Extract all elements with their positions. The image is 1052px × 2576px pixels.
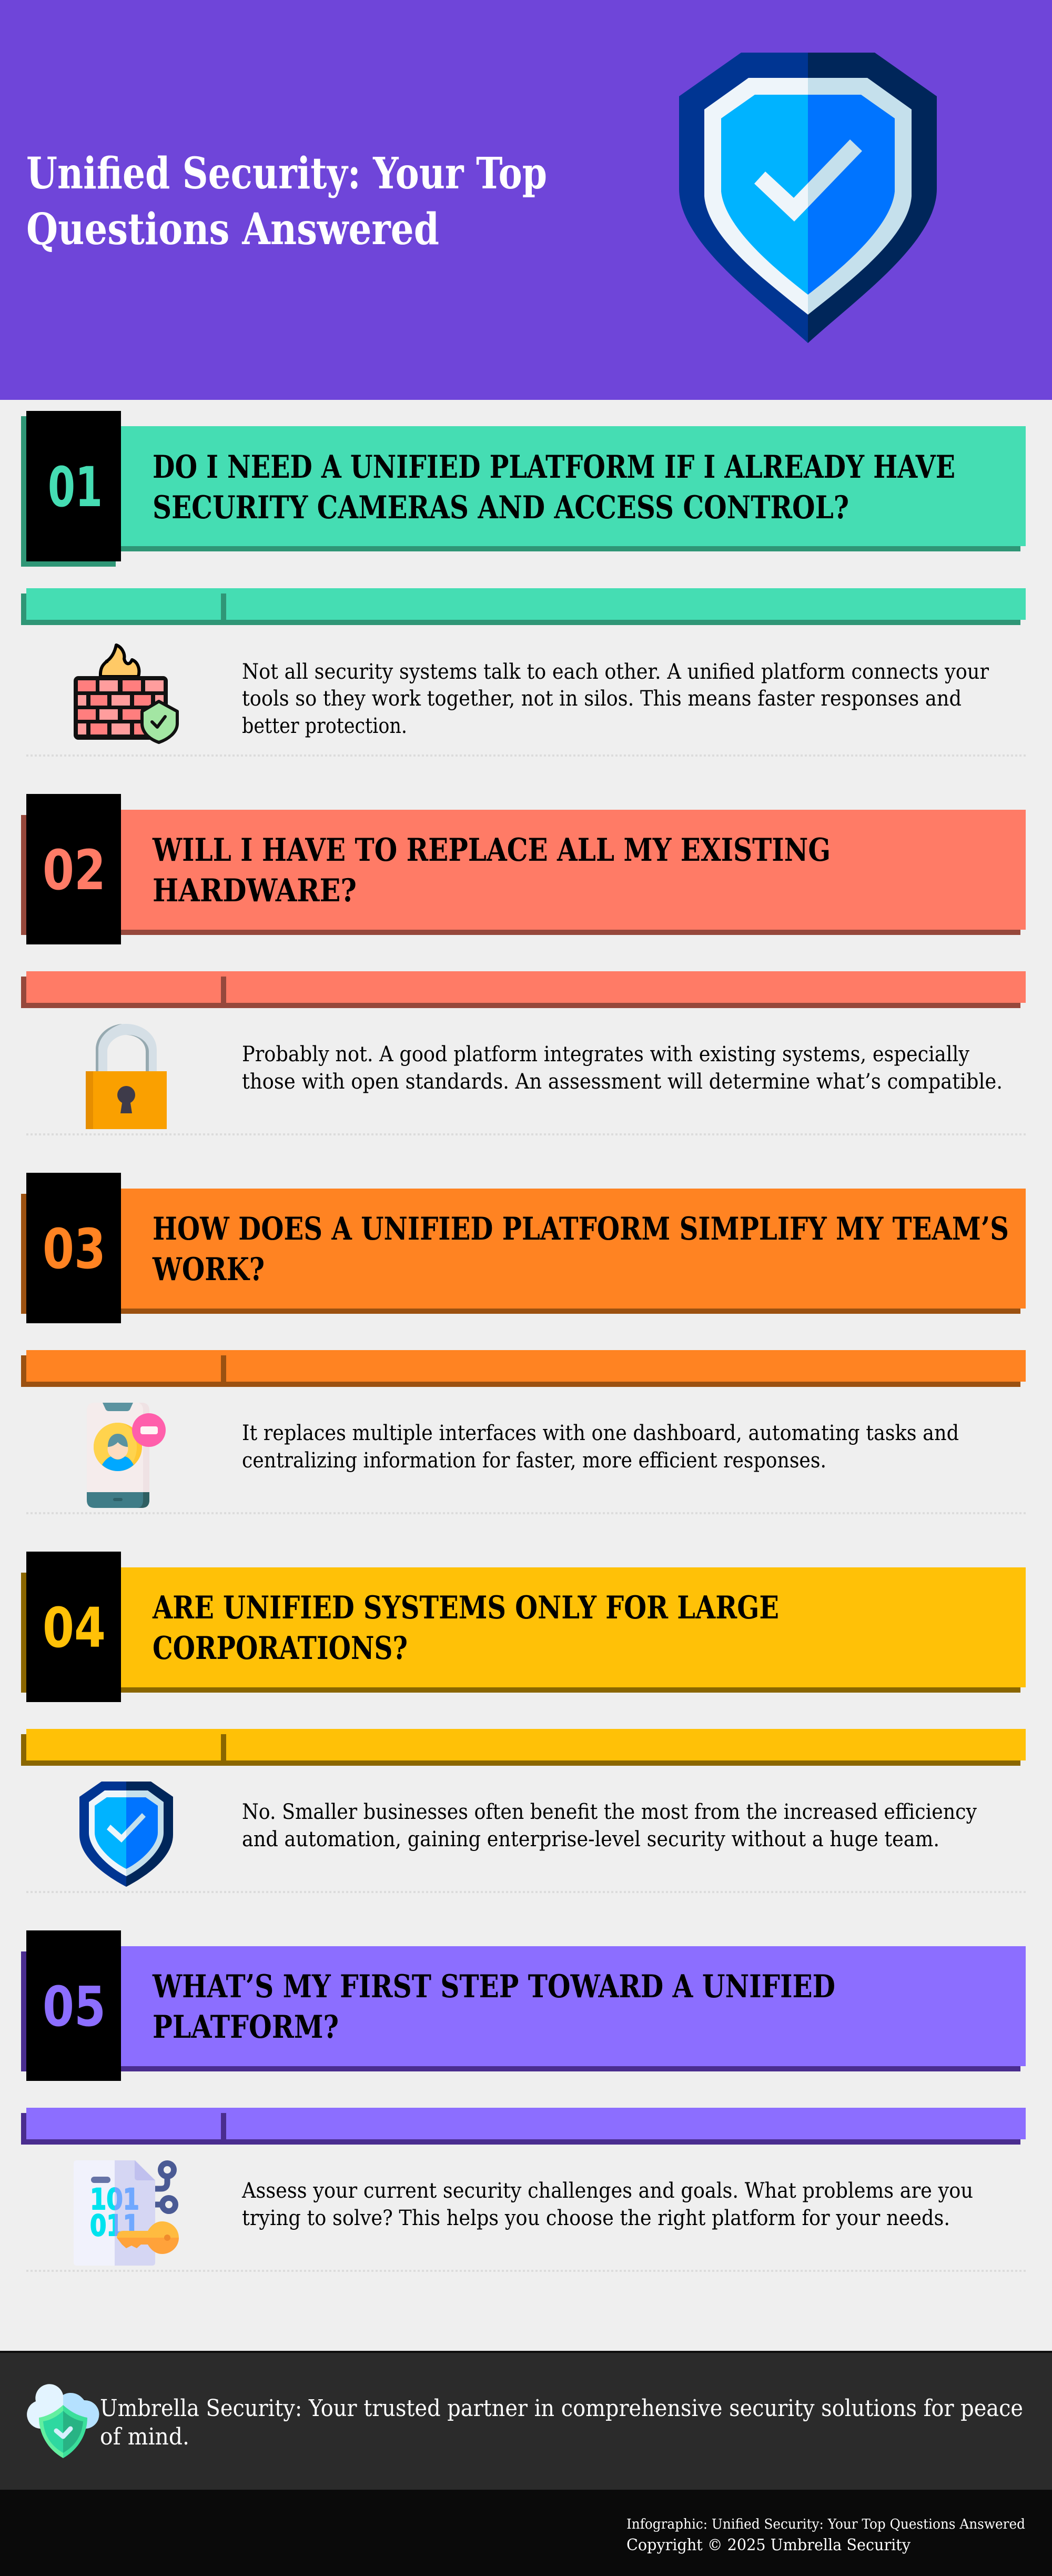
- question banner 4: CORPORATIONS?: [153, 1630, 408, 1667]
- question banner 5: [21, 1946, 1026, 2071]
- number badge 01: [21, 411, 121, 567]
- number badge 02: 02: [43, 838, 106, 902]
- panel: hero header: [0, 0, 1052, 400]
- answer text 4: and automation, gaining enterprise-level security without a huge team.: [242, 1827, 939, 1852]
- answer text 5: Assess your current security challenges and goals. What problems are you: [241, 2179, 973, 2203]
- answer text 2: those with open standards. An assessment will determine what’s compatible.: [242, 1070, 1003, 1094]
- number badge 04: [26, 1552, 121, 1702]
- panel: question 3: [21, 1173, 1026, 1513]
- copyright text: [626, 2517, 1025, 2554]
- number badge 04: 04: [43, 1596, 106, 1660]
- icon: large blue shield with check mark: [679, 53, 937, 343]
- answer text 4: No. Smaller businesses often benefit the most from the increased efficiency: [242, 1800, 977, 1824]
- answer text 3: centralizing information for faster, more efficient responses.: [242, 1448, 826, 1473]
- question banner 2: [21, 810, 1026, 935]
- icon: padlock: [86, 1024, 167, 1129]
- table header bar 4: [21, 1729, 1026, 1766]
- number badge 05: 05: [43, 1975, 106, 2039]
- table header bar 5: [21, 2108, 1026, 2145]
- question banner 4: [21, 1567, 1026, 1693]
- icon: binary document with key: 011: [90, 2209, 139, 2242]
- question banner 2: WILL I HAVE TO REPLACE ALL MY EXISTING: [152, 832, 831, 869]
- icon: cloud with green shield logo: [27, 2384, 99, 2458]
- icon: binary document with key: [74, 2160, 179, 2266]
- question banner 5: PLATFORM?: [153, 2009, 339, 2046]
- question banner 2: HARDWARE?: [153, 872, 357, 909]
- question banner 1: [21, 426, 1026, 551]
- panel: question 1: [21, 411, 1026, 756]
- company tagline: [100, 2395, 1023, 2450]
- copyright text: Copyright © 2025 Umbrella Security: [626, 2536, 911, 2554]
- panel: copyright bar: [0, 2490, 1052, 2576]
- question banner 3: [21, 1189, 1026, 1314]
- panel: company footer: [0, 2351, 1052, 2490]
- company tagline: of mind.: [100, 2423, 189, 2450]
- answer text 1: tools so they work together, not in silos. This means faster responses and: [242, 687, 962, 711]
- answer text 1: [242, 660, 989, 738]
- question banner 3: WORK?: [152, 1251, 265, 1288]
- number badge 03: 03: [43, 1217, 106, 1281]
- answer text 3: [242, 1421, 959, 1473]
- panel: question 2: [21, 794, 1026, 1134]
- answer text 3: It replaces multiple interfaces with one dashboard, automating tasks and: [242, 1421, 959, 1445]
- question banner 4: ARE UNIFIED SYSTEMS ONLY FOR LARGE: [152, 1589, 779, 1626]
- answer text 2: Probably not. A good platform integrates with existing systems, especially: [242, 1042, 969, 1066]
- number badge 01: 01: [48, 455, 103, 519]
- title: [26, 148, 547, 255]
- answer text 5: [241, 2179, 973, 2230]
- number badge 02: [26, 794, 121, 944]
- title: Questions Answered: [26, 204, 439, 255]
- answer text 4: [242, 1800, 977, 1852]
- number badge 05: [26, 1930, 121, 2081]
- panel: question 4: [21, 1552, 1026, 1892]
- copyright text: Infographic: Unified Security: Your Top Questions Answered: [626, 2517, 1025, 2532]
- icon: firewall with flame and shield: [75, 645, 177, 742]
- icon: binary document with key: 101: [90, 2182, 139, 2216]
- icon: phone with user profile: [87, 1403, 166, 1508]
- question banner 5: WHAT’S MY FIRST STEP TOWARD A UNIFIED: [152, 1968, 835, 2005]
- question banner 1: SECURITY CAMERAS AND ACCESS CONTROL?: [153, 489, 849, 526]
- answer text 1: better protection.: [242, 714, 407, 738]
- answer text 2: [242, 1042, 1003, 1094]
- title: Unified Security: Your Top: [26, 148, 547, 199]
- answer text 5: trying to solve? This helps you choose the right platform for your needs.: [242, 2206, 950, 2230]
- answer text 1: Not all security systems talk to each other. A unified platform connects your: [242, 660, 989, 684]
- table header bar 2: [21, 971, 1026, 1008]
- table header bar 1: [21, 588, 1026, 625]
- panel: question 5: [21, 1930, 1026, 2271]
- number badge 03: [26, 1173, 121, 1323]
- table header bar 3: [21, 1350, 1026, 1387]
- icon: blue shield with check mark: [79, 1782, 173, 1887]
